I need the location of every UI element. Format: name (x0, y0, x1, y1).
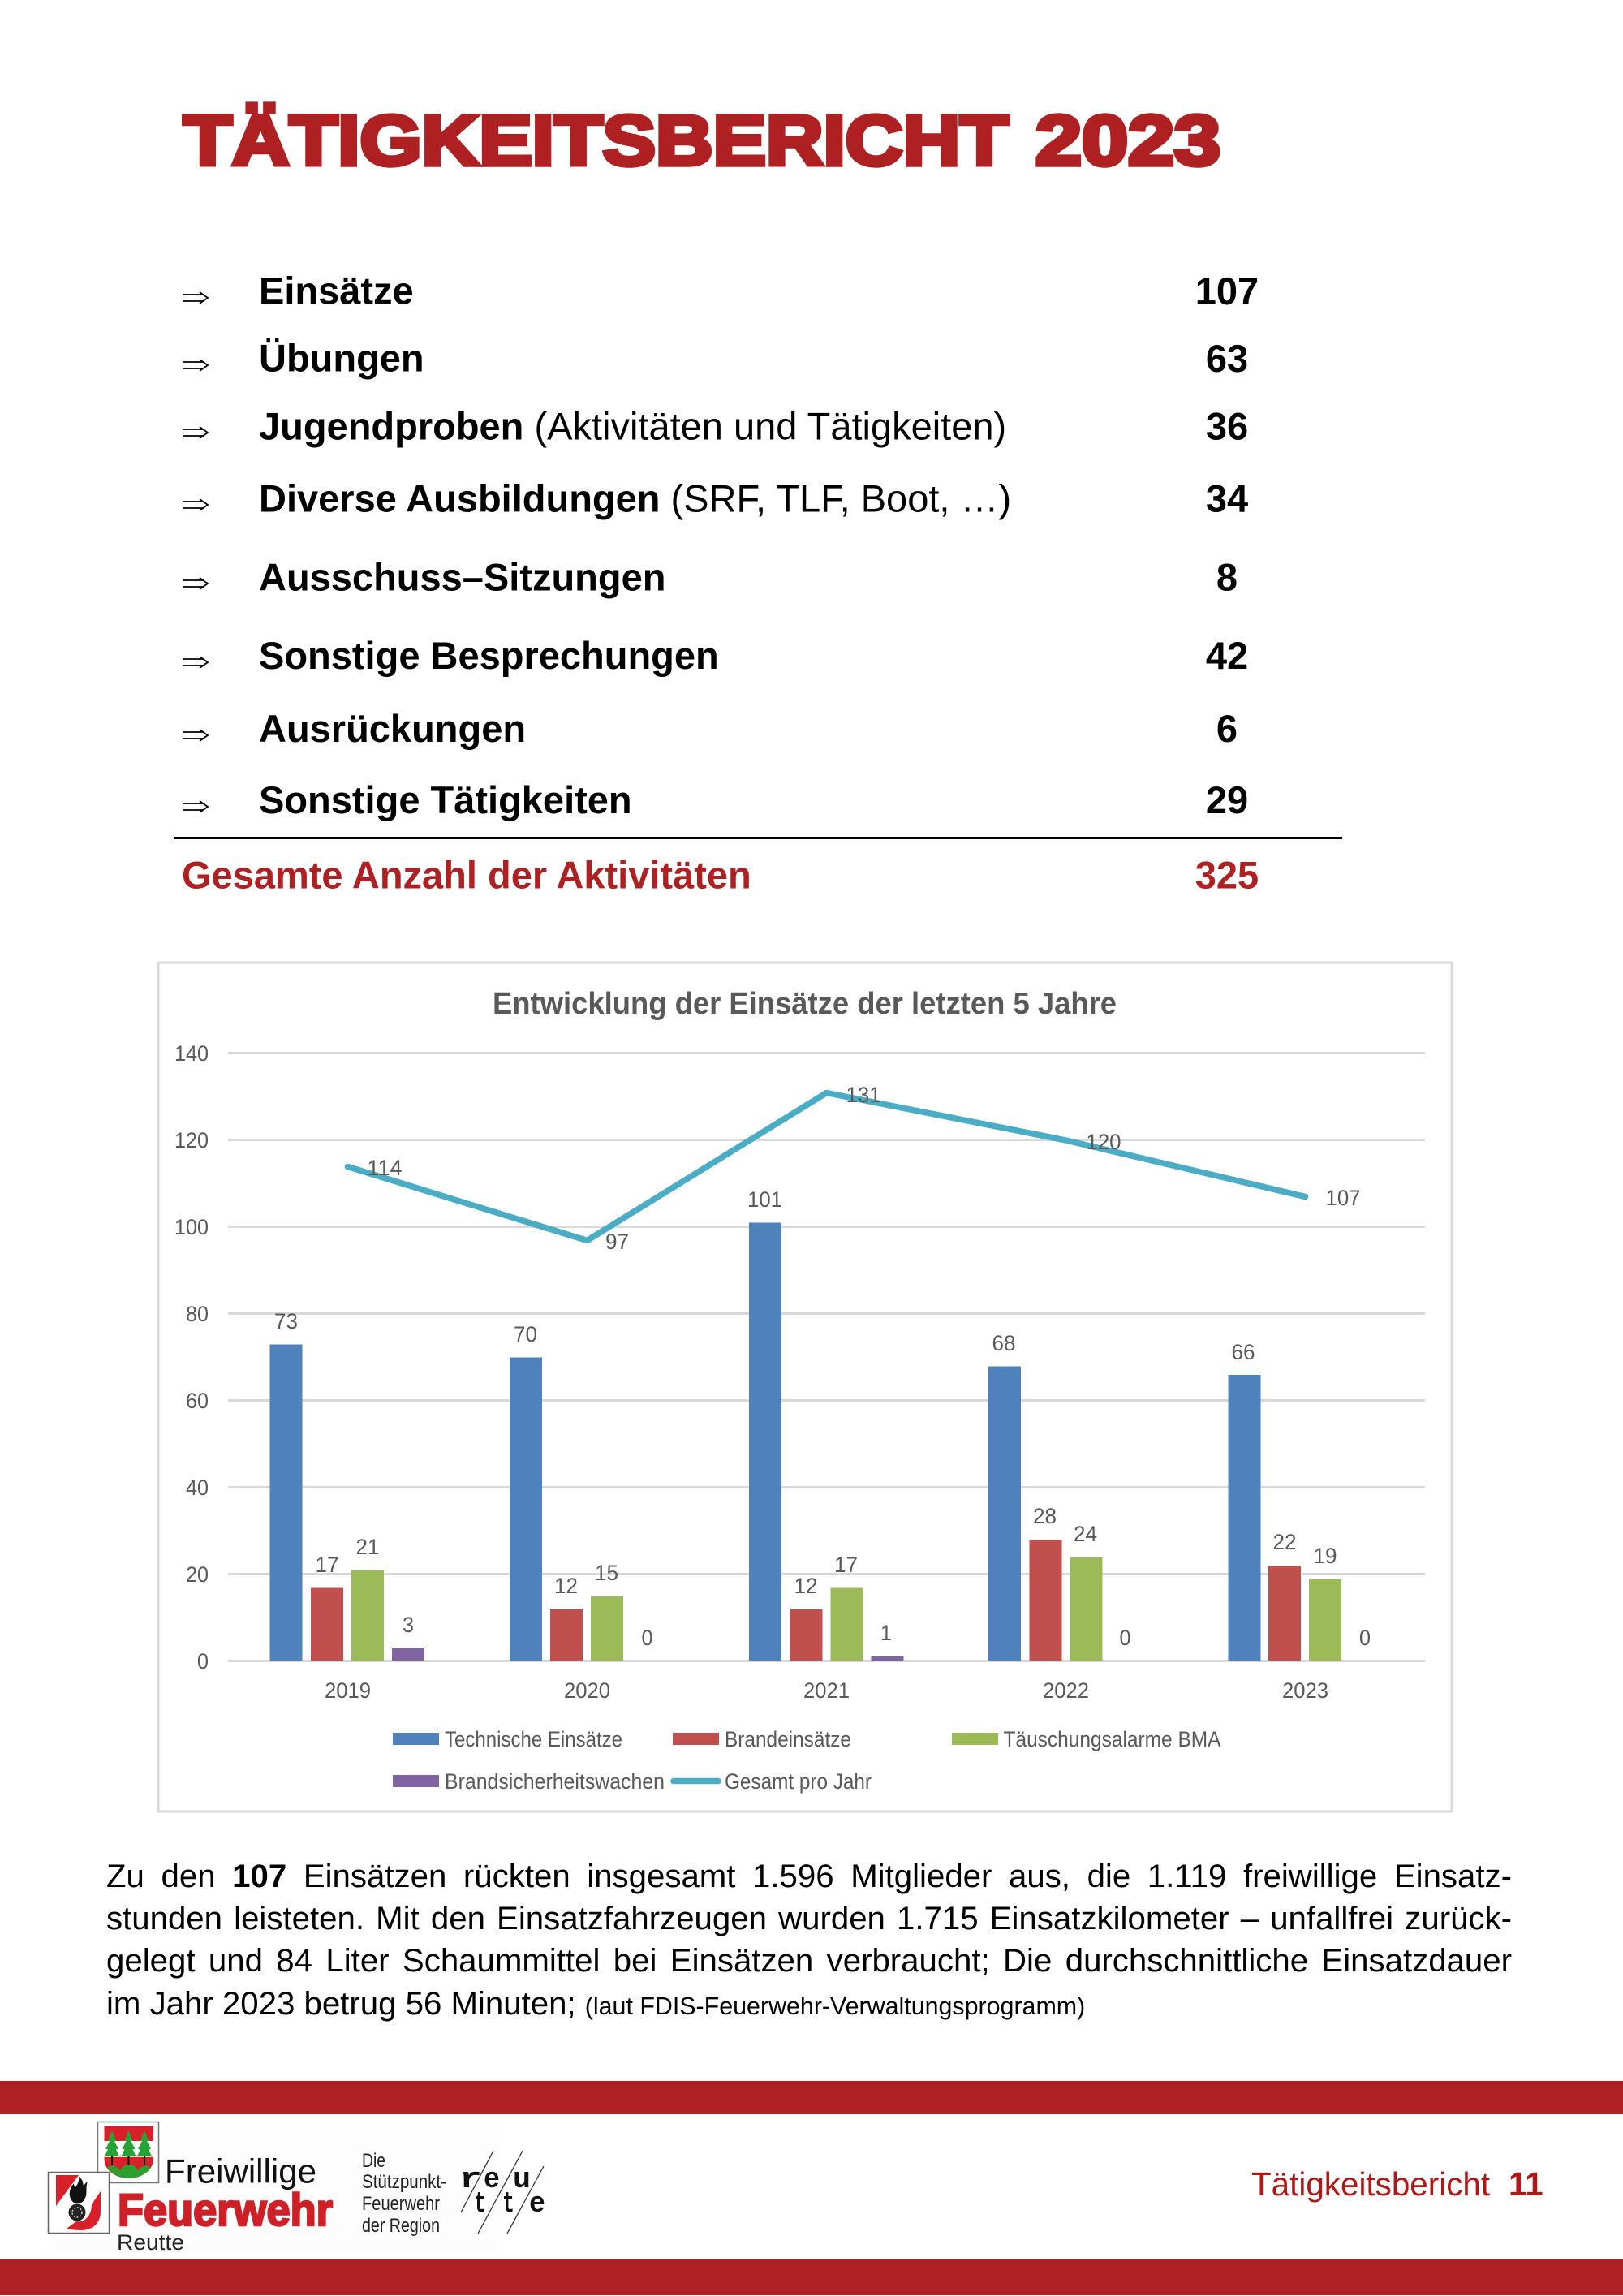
row: Sonstige Tätigkeiten (183, 778, 1248, 821)
gridlines and y axis: 100 (174, 1215, 209, 1239)
legend (393, 1727, 1220, 1794)
footer logos (47, 2122, 545, 2255)
x axis labels: 2020 (564, 1678, 610, 1703)
body paragraph (106, 1857, 1512, 2022)
logo: reutte wordmark: t (474, 2187, 486, 2221)
line labels: 131 (846, 1083, 881, 1107)
gridlines and y axis: 40 (186, 1475, 209, 1500)
line labels: 114 (367, 1156, 403, 1180)
logo text: Freiwillige: Freiwillige (165, 2152, 316, 2190)
slogan text: Stützpunkt- (362, 2171, 446, 2193)
logo text: Feuerwehr: Feuerwehr (118, 2184, 333, 2235)
line labels (367, 1083, 1360, 1254)
slogan text (362, 2150, 446, 2237)
row: Einsätze: Einsätze (259, 269, 414, 312)
row: Übungen: 63 (1206, 337, 1248, 380)
row: Ausschuss-Sitzungen: Ausschuss–Sitzungen (259, 555, 665, 599)
gridlines and y axis: 120 (174, 1128, 209, 1152)
bars: Brandeinsätze (311, 1540, 1301, 1661)
row: Ausschuss-Sitzungen (183, 555, 1238, 599)
title: TÄTIGKEITSBERICHT (183, 101, 1009, 179)
bar data labels: 17 (315, 1553, 339, 1577)
row: Einsätze: 107 (1195, 269, 1259, 312)
row: Diverse Ausbildungen: 34 (1206, 477, 1248, 519)
legend: Brandeinsätze (725, 1727, 851, 1751)
row: Einsätze (183, 269, 1259, 312)
row: Sonstige Tätigkeiten: 29 (1206, 778, 1248, 821)
bar data labels: 0 (1359, 1626, 1371, 1650)
x axis labels (325, 1678, 1328, 1703)
bar data labels: 28 (1033, 1504, 1057, 1528)
row: Übungen (183, 336, 1248, 380)
row: total: Gesamte Anzahl der Aktivitäten (182, 854, 751, 896)
x axis labels: 2022 (1043, 1678, 1089, 1703)
bar data labels: 21 (355, 1535, 380, 1559)
line labels: 120 (1086, 1130, 1121, 1154)
icon: fire brigade emblem (49, 2172, 109, 2234)
bar data labels: 12 (554, 1574, 578, 1598)
footer bar top (0, 2081, 1623, 2114)
row: Sonstige Tätigkeiten: Sonstige Tätigkeiten (259, 778, 632, 821)
logo: reutte wordmark: e (529, 2187, 545, 2221)
line labels: 107 (1326, 1186, 1360, 1210)
row: Ausrückungen: Ausrückungen (259, 707, 526, 750)
body paragraph: gelegt und 84 Liter Schaummittel bei Einsätzen verbraucht; Die durchschnittliche Einsatzdauer (106, 1942, 1512, 1979)
slogan text: Feuerwehr (362, 2193, 440, 2215)
bar data labels: 3 (403, 1613, 414, 1637)
bar data labels: 15 (595, 1561, 618, 1585)
chart title: Entwicklung der Einsätze der letzten 5 Jahre (493, 987, 1117, 1021)
x axis labels: 2023 (1282, 1678, 1328, 1703)
footer page label: Tätigkeitsbericht (1251, 2165, 1490, 2203)
x axis labels: 2019 (325, 1678, 371, 1703)
body paragraph: Zu den 107 Einsätzen rückten insgesamt 1.596 Mitglieder aus, die 1.119 freiwillige Einsatz- (106, 1857, 1512, 1894)
row: total (182, 854, 1259, 896)
line labels: 97 (605, 1230, 629, 1254)
gridlines and y axis (174, 1041, 1425, 1674)
slogan text: Die (362, 2150, 385, 2172)
bar data labels: 0 (641, 1626, 652, 1650)
bar data labels: 12 (794, 1574, 818, 1598)
gridlines and y axis: 140 (174, 1041, 209, 1066)
logo: reutte wordmark: e (484, 2163, 500, 2196)
row: Sonstige Besprechungen (183, 634, 1248, 677)
body paragraph: stunden leisteten. Mit den Einsatzfahrzeugen wurden 1.715 Einsatzkilometer – unfallfrei zurück- (106, 1900, 1512, 1936)
line: Gesamt pro Jahr (347, 1092, 1305, 1240)
bars: Brandsicherheitswachen (392, 1648, 904, 1661)
row: Ausrückungen: 6 (1216, 707, 1238, 750)
activity list (174, 269, 1342, 896)
row: Übungen: Übungen (259, 336, 424, 380)
row: total: 325 (1195, 854, 1259, 896)
row: Sonstige Besprechungen: Sonstige Besprechungen (259, 634, 719, 677)
footer bar bottom (0, 2259, 1623, 2295)
bar data labels: 17 (834, 1553, 858, 1577)
footer page label: 11 (1509, 2165, 1543, 2203)
slogan text: der Region (362, 2215, 440, 2237)
bars: Technische Einsätze (269, 1222, 1261, 1661)
gridlines and y axis: 20 (186, 1562, 209, 1587)
bar data labels: 70 (514, 1322, 537, 1346)
logo: reutte wordmark: t (502, 2187, 514, 2221)
bar data labels: 68 (992, 1331, 1016, 1355)
legend: Brandsicherheitswachen (445, 1769, 665, 1794)
x axis labels: 2021 (803, 1678, 850, 1703)
bar data labels: 101 (747, 1187, 782, 1212)
bar data labels: 22 (1272, 1530, 1297, 1554)
chart panel (157, 961, 1453, 1813)
bar data labels: 24 (1074, 1522, 1097, 1546)
legend: Gesamt pro Jahr (725, 1769, 872, 1794)
legend: Technische Einsätze (445, 1727, 622, 1751)
title: 2023 (1035, 101, 1220, 179)
row: Diverse Ausbildungen: Diverse Ausbildungen (SRF, TLF, Boot, …) (259, 477, 1011, 519)
gridlines and y axis: 0 (197, 1649, 209, 1674)
row: Jugendproben: Jugendproben (Aktivitäten und Tätigkeiten) (259, 404, 1006, 448)
bar data labels: 73 (274, 1309, 298, 1333)
bar data labels: 0 (1120, 1626, 1131, 1650)
logo text: Reutte: Reutte (117, 2230, 184, 2255)
bars: Täuschungsalarme BMA (351, 1557, 1341, 1661)
logo: reutte wordmark: u (513, 2163, 531, 2196)
icon: municipal coat of arms (97, 2122, 159, 2183)
row: Ausschuss-Sitzungen: 8 (1216, 555, 1238, 599)
row: Sonstige Besprechungen: 42 (1206, 634, 1248, 677)
gridlines and y axis: 60 (186, 1389, 209, 1413)
legend: Täuschungsalarme BMA (1003, 1727, 1220, 1751)
row: Jugendproben: 36 (1206, 404, 1248, 448)
logo: reutte wordmark (459, 2151, 545, 2234)
bar data labels (274, 1187, 1371, 1650)
row: Ausrückungen (183, 707, 1238, 750)
gridlines and y axis: 80 (186, 1302, 209, 1326)
logo: reutte wordmark: r (459, 2163, 482, 2196)
bar data labels: 66 (1232, 1340, 1255, 1364)
body paragraph: im Jahr 2023 betrug 56 Minuten; (laut FDIS-Feuerwehr-Verwaltungsprogramm) (106, 1985, 1085, 2022)
bar data labels: 1 (880, 1621, 892, 1645)
bar data labels: 19 (1313, 1544, 1337, 1568)
